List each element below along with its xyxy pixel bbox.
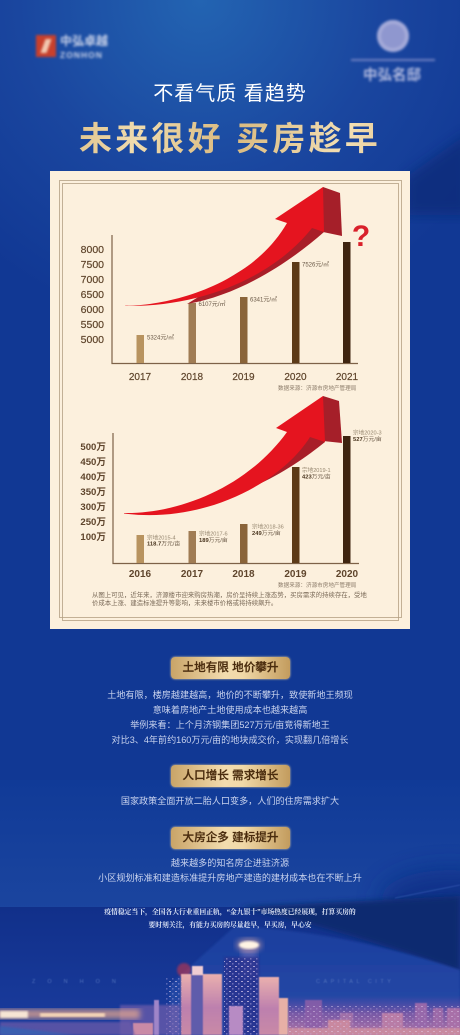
question mark: ? bbox=[352, 220, 370, 253]
y axis labels: 5500 bbox=[81, 319, 104, 331]
x axis years bbox=[129, 569, 359, 580]
distant buildings bbox=[120, 957, 460, 1035]
heading: land limited: 土地有限 地价攀升 bbox=[182, 661, 278, 674]
chart note bbox=[92, 590, 367, 607]
x axis years: 2019 bbox=[232, 372, 255, 383]
bar value labels: 6107元/㎡ bbox=[198, 300, 226, 308]
city skyline bbox=[0, 936, 460, 1035]
icon: red logo square bbox=[36, 35, 56, 57]
chart note: 价成本上涨、建造标准提升等影响，未来楼市价格或将持续飙升。 bbox=[92, 598, 277, 607]
logo: project, right bbox=[350, 18, 436, 84]
text block: developers: 越来越多的知名房企进驻济源 bbox=[171, 858, 289, 868]
bar value labels: 宗地2018-36 bbox=[252, 522, 284, 530]
y axis labels: 250万 bbox=[80, 517, 106, 528]
bar value labels: 宗地2020-3 bbox=[353, 428, 382, 436]
bar value labels: 527万元/亩 bbox=[353, 435, 382, 443]
subtitle: 不看气质 看趋势 bbox=[153, 83, 307, 105]
bars bbox=[136, 436, 350, 563]
y axis labels: 100万 bbox=[80, 532, 106, 543]
chart: land price per mu bbox=[80, 396, 382, 607]
bar value labels: 宗地2017-6 bbox=[199, 530, 228, 538]
y axis labels: 350万 bbox=[80, 487, 106, 498]
highway light trail bbox=[0, 1009, 140, 1035]
logo name text: ZONHON bbox=[60, 50, 103, 60]
bar value labels: 5324元/㎡ bbox=[147, 334, 174, 342]
y axis labels: 300万 bbox=[80, 502, 106, 513]
heading: population: 人口增长 需求增长 bbox=[182, 769, 278, 782]
heading: developers bbox=[171, 827, 290, 849]
spotlight bbox=[236, 938, 262, 977]
closing text: 要时刻关注，有能力买房的尽量趁早，早买房，早心安 bbox=[148, 922, 312, 929]
x axis years: 2018 bbox=[232, 569, 255, 580]
y axis labels: 8000 bbox=[81, 244, 104, 256]
text block: developers: 小区规划标准和建造标准提升房地产建造的建材成本也在不断上升 bbox=[98, 873, 362, 883]
bar value labels: 7526元/㎡ bbox=[302, 260, 329, 268]
x axis years bbox=[129, 372, 359, 383]
watermark words: ZONHON bbox=[32, 979, 128, 985]
x axis years: 2019 bbox=[284, 569, 307, 580]
arrow: rising land price bbox=[124, 396, 342, 515]
chart note: 从图上可见，近年来，济源楼市迎来购房热潮，房价呈持续上涨态势，买房需求的持续存在，受地 bbox=[92, 590, 367, 599]
icon: round emblem bbox=[377, 20, 409, 52]
bar value labels bbox=[147, 428, 382, 548]
bar value labels: 189万元/亩 bbox=[199, 536, 228, 544]
y axis labels bbox=[81, 244, 104, 346]
icon mark bbox=[40, 39, 52, 53]
bar value labels: 249万元/亩 bbox=[252, 529, 281, 537]
text block: developers bbox=[98, 858, 362, 883]
x axis years: 2020 bbox=[336, 569, 359, 580]
y axis labels: 6500 bbox=[81, 289, 104, 301]
text block: population: 国家政策全面开放二胎人口变多，人们的住房需求扩大 bbox=[121, 796, 339, 806]
data source: 数据来源：济源市房地产管理局 bbox=[278, 384, 357, 392]
logo: developer, left bbox=[34, 33, 110, 60]
logo tagline bbox=[351, 59, 435, 61]
chart: price per square metre bbox=[81, 187, 370, 392]
watermark words bbox=[32, 979, 394, 985]
x axis years: 2016 bbox=[129, 569, 152, 580]
bright buildings bbox=[181, 966, 288, 1035]
x axis years: 2018 bbox=[181, 372, 204, 383]
y axis labels: 6000 bbox=[81, 304, 104, 316]
x axis years: 2020 bbox=[284, 372, 307, 383]
y axis labels: 7000 bbox=[81, 274, 104, 286]
logo name text bbox=[58, 33, 110, 60]
y axis labels: 5000 bbox=[81, 334, 104, 346]
text block: land: 土地有限，楼房越建越高，地价的不断攀升，致使新地王频现 bbox=[107, 690, 353, 700]
arrow: rising price bbox=[125, 187, 342, 306]
y axis labels: 400万 bbox=[80, 472, 106, 483]
x axis years: 2017 bbox=[181, 569, 204, 580]
panel: charts bbox=[50, 171, 410, 629]
text block: land: 举例来看：上个月济钢集团527万元/亩竞得新地王 bbox=[130, 720, 330, 730]
y axis labels: 500万 bbox=[80, 442, 106, 453]
text block: land bbox=[107, 690, 353, 745]
text block: land: 意味着房地产土地使用成本也越来越高 bbox=[153, 705, 307, 715]
heading: developers: 大房企多 建标提升 bbox=[182, 831, 278, 844]
bar value labels: 423万元/亩 bbox=[302, 472, 331, 480]
heading: population bbox=[171, 765, 290, 787]
y axis labels: 7500 bbox=[81, 259, 104, 271]
closing text: 疫情稳定当下，全国各大行业重回正轨，“金九银十”市场热度已经展现，打算买房的 bbox=[104, 909, 356, 916]
closing text bbox=[104, 908, 356, 929]
watermark words: CAPITAL CITY bbox=[316, 979, 394, 985]
heading: land limited bbox=[171, 657, 290, 679]
bar value labels: 6341元/㎡ bbox=[250, 296, 277, 304]
bar value labels: 宗地2019-1 bbox=[302, 466, 331, 474]
x axis years: 2021 bbox=[336, 372, 359, 383]
y axis labels: 450万 bbox=[80, 457, 106, 468]
bar value labels: 118.7万元/亩 bbox=[147, 540, 180, 548]
bars bbox=[136, 242, 350, 363]
y axis labels bbox=[80, 442, 106, 543]
main title: 未来很好 买房趁早 bbox=[79, 120, 381, 157]
logo name: 中弘名邸 bbox=[363, 68, 421, 84]
text block: land: 对比3、4年前约160万元/亩的地块成交价，实现翻几倍增长 bbox=[112, 735, 348, 745]
x axis years: 2017 bbox=[129, 372, 152, 383]
data source: 数据来源：济源市房地产管理局 bbox=[278, 581, 357, 589]
bar value labels bbox=[147, 260, 329, 342]
logo name text: 中弘卓越 bbox=[60, 34, 108, 48]
bar value labels: 宗地2015-4 bbox=[147, 534, 176, 542]
main title bbox=[0, 118, 460, 160]
